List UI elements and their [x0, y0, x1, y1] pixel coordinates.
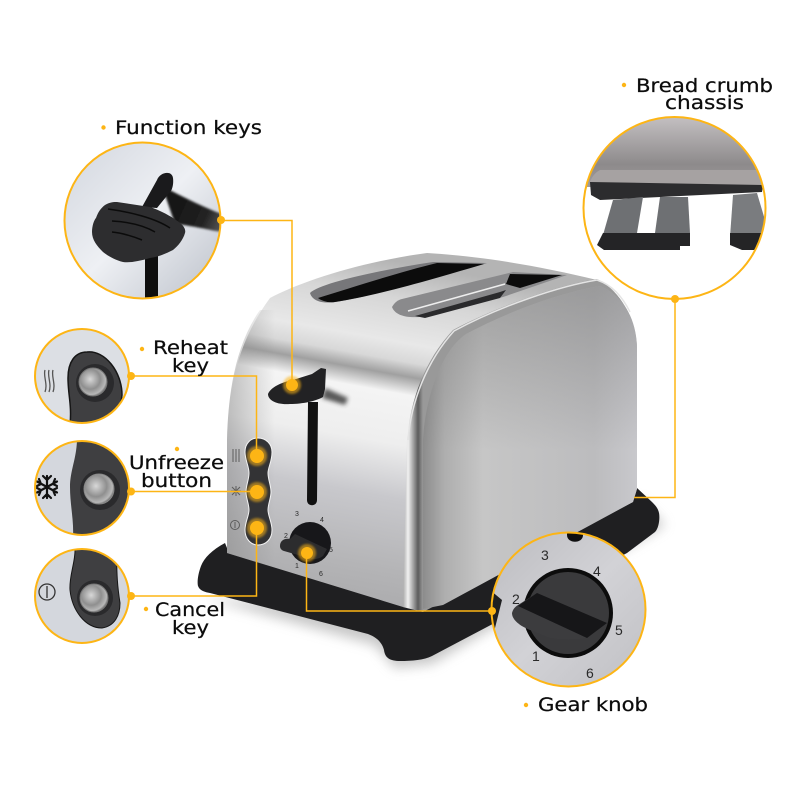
panel: gear knob: 4: [593, 563, 601, 579]
panel: gear knob: 1: [532, 648, 540, 664]
toaster front and top shell: [227, 253, 625, 612]
connector: unfreeze button: [131, 490, 256, 492]
label: bread crumb chassis: [622, 75, 773, 114]
toaster lever slot: [307, 402, 318, 505]
panel: cancel key: [35, 545, 129, 643]
panel: gear knob: 2: [512, 591, 520, 607]
gear knob on toaster: 1: [295, 563, 299, 570]
label: cancel key: [144, 599, 225, 639]
connector: function keys: [222, 220, 292, 385]
panel: gear knob: 6: [586, 665, 594, 681]
icon: snowflake: [37, 476, 57, 498]
panel icons: [230, 449, 241, 530]
connector: cancel key: [131, 528, 256, 596]
label: bread crumb chassis: chassis: [665, 92, 744, 114]
label: unfreeze button: Unfreeze: [129, 452, 224, 474]
toaster side panel: [423, 286, 637, 609]
panel: reheat key: [35, 329, 129, 425]
panel: function keys: [64, 142, 222, 305]
panel: bread crumb chassis: [580, 112, 770, 299]
panel: gear knob: 3: [541, 547, 549, 563]
gear knob on toaster: 6: [319, 571, 323, 578]
toaster corner strip and rim: [403, 279, 637, 612]
toaster lever shadow: [322, 388, 348, 405]
button strip: [245, 438, 272, 545]
label: cancel key: key: [172, 617, 209, 639]
label: gear knob: Gear knob: [538, 694, 648, 716]
hotspot dots on toaster: [247, 376, 316, 562]
icon: knob handle: [512, 598, 531, 630]
icon: heat waves: [45, 370, 54, 392]
label: reheat key: [140, 337, 228, 377]
connector: reheat key: [131, 376, 256, 455]
label: cancel key: Cancel: [155, 599, 225, 621]
connector: gear knob: [306, 553, 492, 611]
label: reheat key: key: [172, 355, 209, 377]
gear knob on toaster: 2: [284, 533, 288, 540]
label: reheat key: Reheat: [153, 337, 228, 359]
icon: power symbol: [39, 584, 55, 600]
label: function keys: Function keys: [115, 117, 262, 139]
icon: crumb trays: [603, 197, 643, 235]
label: unfreeze button: button: [141, 470, 212, 492]
gear knob on toaster: 4: [320, 517, 324, 524]
label: bread crumb chassis: Bread crumb: [636, 75, 773, 97]
toaster: [198, 253, 665, 668]
label: unfreeze button: [129, 447, 224, 492]
toaster lever: [268, 368, 326, 404]
panel: unfreeze button: [35, 438, 132, 538]
toaster base: [198, 488, 659, 661]
gear knob on toaster: 5: [329, 547, 333, 554]
connector: bread crumb chassis: [634, 299, 675, 498]
gear knob on toaster: [280, 511, 333, 578]
gear knob on toaster: 3: [295, 511, 299, 518]
bread slot front: [392, 272, 567, 318]
panel: gear knob: [490, 530, 646, 686]
anchor dots on callout circles: [127, 216, 679, 615]
panel: gear knob: 5: [615, 622, 623, 638]
rim highlight: [408, 280, 630, 440]
icon: lever blade: [92, 202, 185, 262]
bread slot rear: [310, 262, 487, 303]
